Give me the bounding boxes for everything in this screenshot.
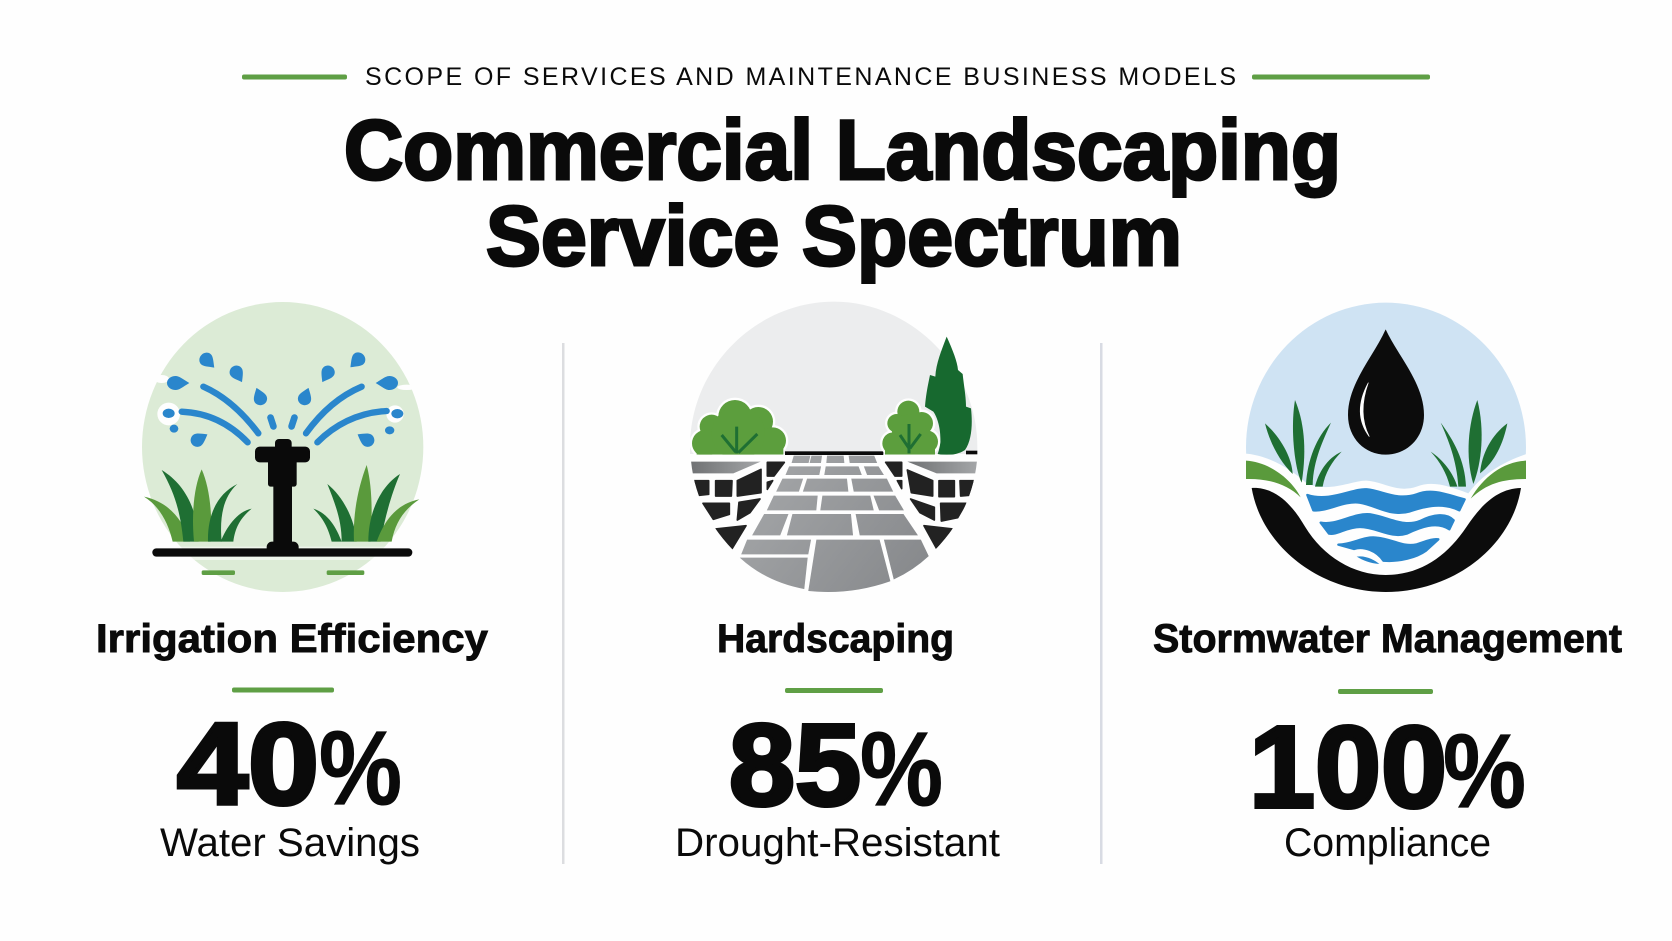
heading: Stormwater Management [1153, 617, 1622, 661]
stat [1249, 702, 1526, 832]
eyebrow left rule [242, 74, 347, 80]
title: Commercial Landscaping [344, 103, 1341, 197]
icon: sprinkler [142, 302, 423, 592]
stat label: Drought-Resistant [675, 821, 1000, 865]
stat label: Compliance [1284, 821, 1491, 865]
panel: irrigation efficiency [96, 302, 489, 865]
accent rule [785, 688, 883, 693]
stat [177, 699, 402, 829]
eyebrow text: SCOPE OF SERVICES AND MAINTENANCE BUSINESS MODELS [365, 63, 1236, 91]
infographic [98, 67, 1622, 864]
heading: Hardscaping [717, 617, 954, 661]
stat [729, 700, 943, 830]
eyebrow right rule [1252, 74, 1430, 80]
panel: hardscaping [675, 302, 1000, 865]
icon: stormwater basin [1243, 303, 1528, 595]
stat label: Water Savings [160, 821, 420, 865]
column divider 1 [562, 343, 564, 864]
stat: 100 [1249, 702, 1447, 832]
accent rule [232, 688, 334, 692]
panel: stormwater management [1153, 303, 1622, 865]
stat: 40 [177, 699, 319, 829]
icon: paved path [690, 302, 977, 592]
heading: Irrigation Efficiency [96, 617, 489, 661]
stat: % [860, 711, 943, 828]
stat: % [1443, 713, 1526, 830]
stat: 85 [729, 700, 861, 830]
column divider 2 [1100, 343, 1102, 864]
title line 2: Service Spectrum [486, 189, 1182, 283]
stat: % [319, 710, 402, 827]
header [242, 63, 1430, 283]
accent rule [1338, 689, 1433, 694]
